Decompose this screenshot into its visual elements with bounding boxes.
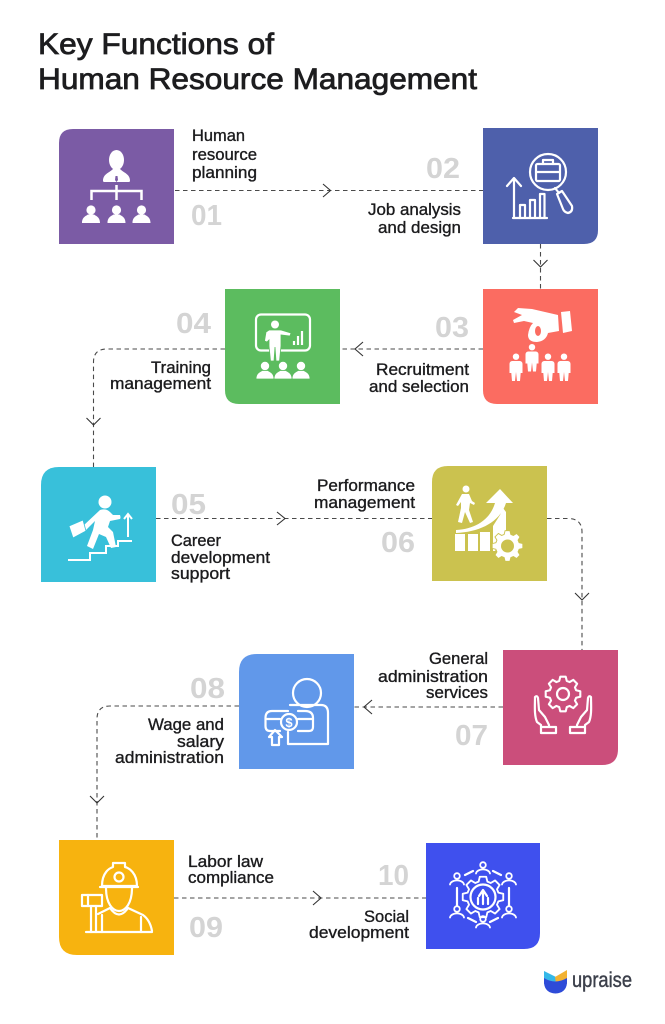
number 01: 01 (191, 200, 222, 232)
label 09: compliance (188, 869, 274, 887)
label 04: management (110, 375, 211, 393)
label 07: General (429, 650, 488, 668)
logo: upraise (544, 969, 632, 994)
label 03 (369, 361, 469, 396)
icon: worker with gavel (82, 863, 152, 932)
card 10 (426, 843, 540, 949)
label 02: and design (378, 219, 461, 237)
label 05: development (171, 549, 270, 567)
card 08 (239, 654, 354, 769)
number 04: 04 (176, 308, 211, 340)
number 06: 06 (381, 527, 415, 559)
arrow: 04 to 05 (86, 349, 225, 467)
label 01 (192, 127, 257, 182)
number 07: 07 (455, 720, 488, 752)
number 09: 09 (189, 912, 223, 944)
panel: step 08 wage and salary administration (115, 654, 354, 769)
icon: hands holding gear (535, 677, 591, 733)
icon: people network around gear (450, 862, 516, 928)
arrow: 09 to 10 (174, 891, 426, 905)
panel: step 04 training management (110, 289, 340, 404)
icon: presenter with audience (256, 314, 310, 379)
panel: step 06 performance management (314, 466, 547, 581)
label 04 (110, 359, 211, 393)
card 09 (59, 840, 174, 955)
label 08: salary (177, 733, 225, 751)
label 08 (115, 716, 225, 767)
arrow: 06 to 07 (547, 518, 589, 650)
arrow: 03 to 04 (340, 342, 483, 356)
label 06: management (314, 494, 415, 512)
label 06 (314, 477, 415, 512)
icon: magnifier and bar chart (507, 154, 572, 218)
card 01 (59, 129, 174, 244)
label 10: development (309, 924, 409, 942)
number 10: 10 (378, 860, 409, 892)
number 02: 02 (426, 153, 460, 185)
label 10: Social (364, 908, 409, 926)
title (38, 28, 478, 96)
panel: step 10 social development (309, 843, 540, 949)
panel: step 02 job analysis and design (368, 128, 598, 244)
card 04 (225, 289, 340, 404)
label 04: Training (151, 359, 211, 377)
label 05: Career (171, 532, 221, 550)
label 02 (368, 201, 461, 237)
label 01: planning (192, 164, 257, 182)
label 07 (378, 650, 488, 702)
arrow: 01 to 02 (175, 184, 483, 197)
panel: step 05 career development support (41, 467, 270, 583)
icon: man climbing stairs (68, 496, 132, 560)
number 03: 03 (435, 312, 469, 344)
arrow: 07 to 08 (354, 700, 503, 714)
label 05 (171, 532, 270, 583)
label 09 (188, 853, 274, 887)
label 05: support (171, 565, 230, 583)
label 03: and selection (369, 378, 469, 396)
number 05: 05 (171, 489, 206, 521)
title: Human Resource Management (38, 63, 478, 96)
number 08: 08 (190, 673, 225, 705)
label 03: Recruitment (376, 361, 469, 379)
card 06 (432, 466, 547, 581)
card 02 (483, 128, 598, 244)
card 05 (41, 467, 156, 582)
card 03 (483, 289, 598, 404)
panel: step 07 general administration services (378, 650, 618, 765)
label 02: Job analysis (368, 201, 461, 219)
label 01: resource (192, 146, 257, 164)
arrow: 08 to 09 (90, 706, 239, 840)
label 09: Labor law (188, 853, 263, 871)
arrow: 02 to 03 (534, 244, 548, 289)
label 07: services (426, 684, 488, 702)
label 01: Human (192, 127, 245, 145)
icon: logo shield (544, 970, 567, 994)
icon: growth arrow with gear (455, 486, 523, 561)
arrow: 05 to 06 (156, 512, 432, 525)
icon: org chart (82, 150, 150, 223)
label 08: Wage and (148, 716, 224, 734)
label 06: Performance (317, 477, 415, 495)
panel: step 01 human resource planning (59, 127, 257, 244)
icon: person with salary card (266, 679, 328, 745)
label 10 (309, 908, 409, 942)
label 08: administration (115, 749, 224, 767)
icon: hand picking person (510, 308, 572, 381)
wordmark: upraise (572, 969, 632, 992)
card 07 (503, 650, 618, 765)
symbol: dollar sign: $ (285, 715, 293, 730)
title: Key Functions of (38, 28, 275, 61)
label 07: administration (378, 668, 488, 686)
panel: step 09 labor law compliance (59, 840, 274, 955)
panel: step 03 recruitment and selection (369, 289, 598, 404)
